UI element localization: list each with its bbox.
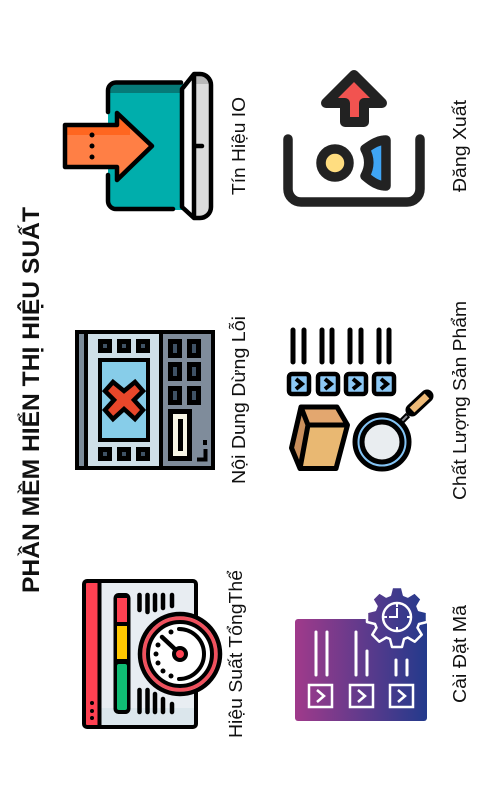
icon: overall performance gauge — [84, 581, 220, 727]
title: PHẦN MỀM HIỂN THỊ HIỆU SUẤT — [17, 207, 45, 593]
label: Nội Dung Dừng Lỗi: Nội Dung Dừng Lỗi — [228, 316, 249, 484]
label: Tín Hiệu IO: Tín Hiệu IO — [229, 97, 249, 195]
icon: stop content control panel — [75, 330, 215, 470]
icon: log out tray with arrow — [288, 75, 420, 202]
label: Đăng Xuất: Đăng Xuất — [450, 100, 470, 192]
icon: code settings panel with gear — [295, 587, 427, 721]
icon: signal IO door with arrow — [65, 74, 211, 218]
icon: product quality check — [289, 330, 427, 469]
label: Cài Đặt Mã: Cài Đặt Mã — [450, 604, 470, 703]
label: Hiệu Suất TổngThể: Hiệu Suất TổngThể — [226, 570, 246, 738]
label: Chất Lượng Sản Phẩm: Chất Lượng Sản Phẩm — [450, 301, 470, 500]
